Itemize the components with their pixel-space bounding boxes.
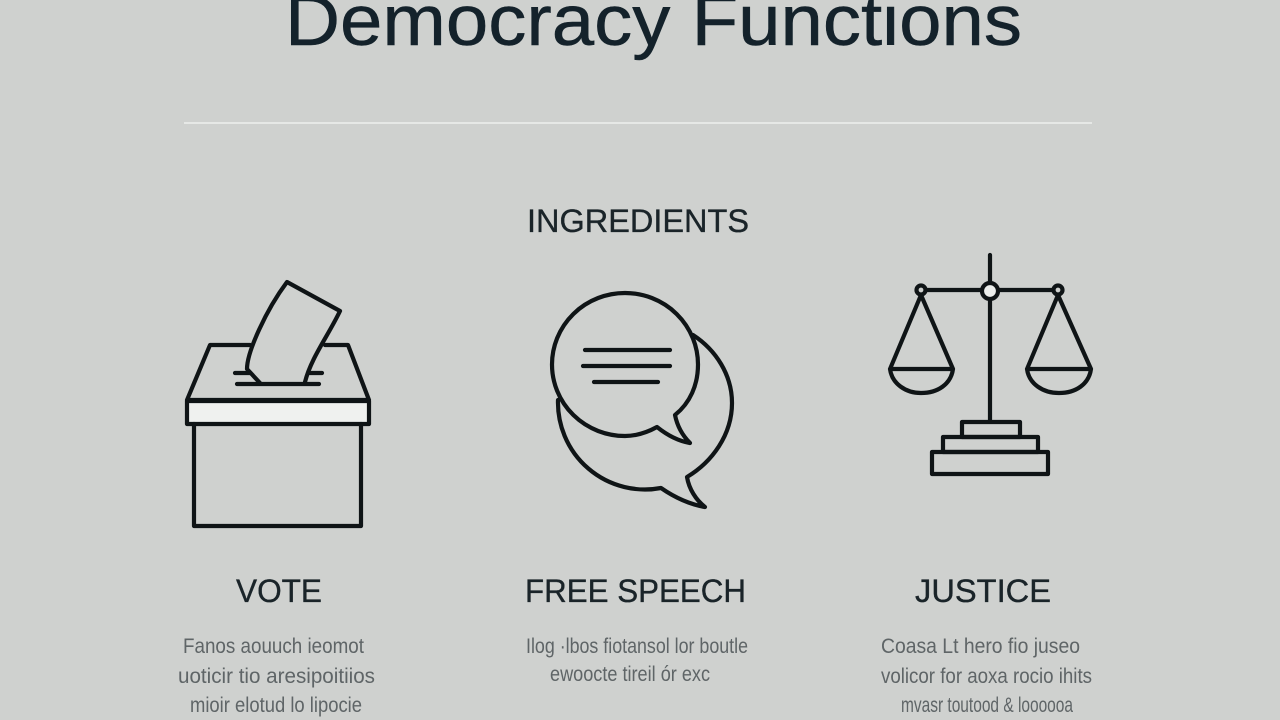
text block: vote description: mioir elotud lo lipocie (190, 694, 362, 717)
icon: scales of justice (890, 255, 1091, 474)
text block: justice description: mvasr toutood & loooooa (901, 694, 1073, 717)
text block: vote description (178, 635, 375, 717)
text block: justice description (881, 635, 1092, 717)
column label: vote: VOTE (236, 573, 322, 609)
column label: free speech: FREE SPEECH (525, 573, 746, 609)
section heading: ingredients: INGREDIENTS (527, 203, 749, 239)
text block: free speech description: ewoocte tireil ór exc (550, 663, 710, 686)
text block: justice description: volicor for aoxa rocio ihits (881, 665, 1092, 688)
icon: speech bubbles (552, 293, 732, 507)
text block: vote description: uoticir tio aresipoitiios (178, 665, 375, 688)
column label: justice: JUSTICE (915, 573, 1051, 609)
text block: free speech description: Ilog ·lbos fiotansol lor boutle (526, 635, 748, 658)
text block: justice description: Coasa Lt hero fio juseo (881, 635, 1080, 658)
icon: ballot box (187, 282, 369, 526)
text block: free speech description (526, 635, 748, 686)
text block: vote description: Fanos aouuch ieomot (183, 635, 364, 658)
